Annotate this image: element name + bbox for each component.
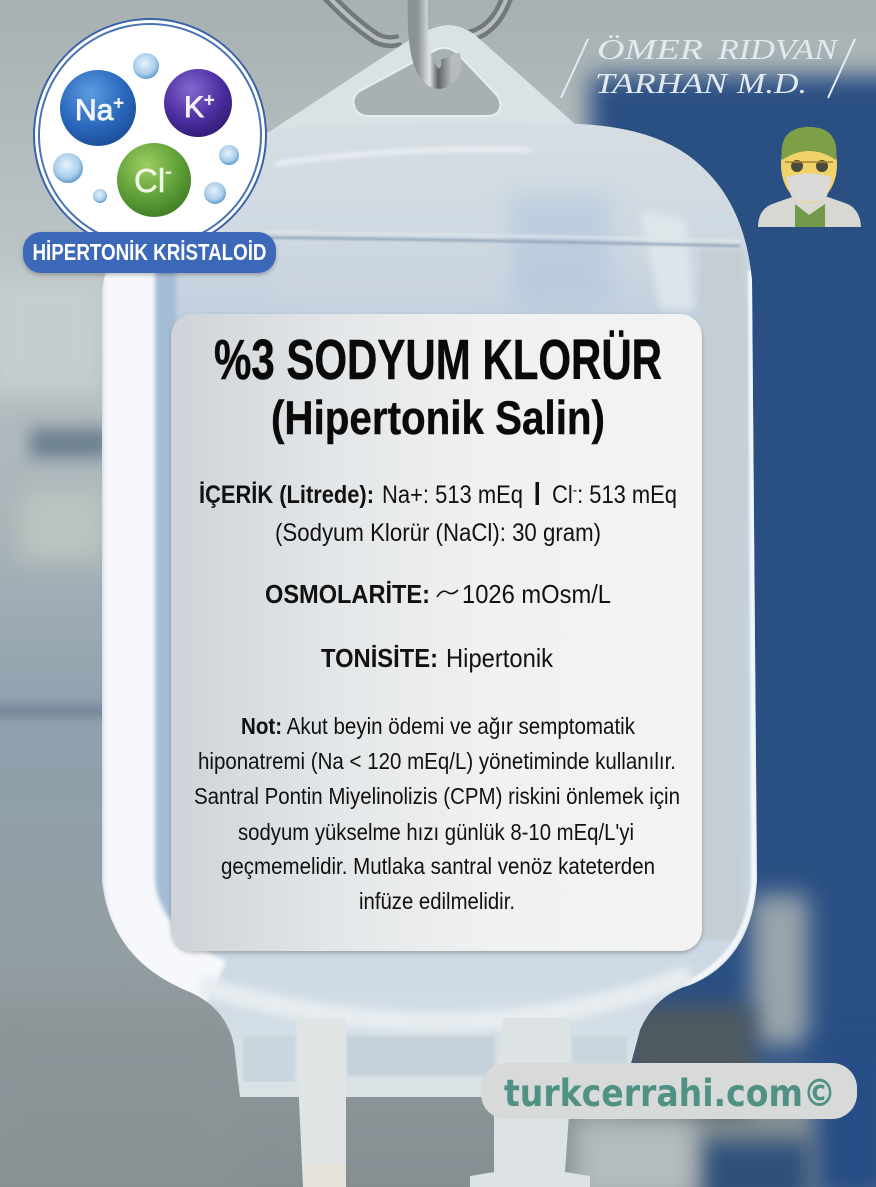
- bag hanger tab: [275, 25, 580, 140]
- top sheen: [275, 149, 530, 164]
- right shoulder highlight: [640, 210, 695, 310]
- author signature: [561, 34, 855, 100]
- chloride ion: Cl: [134, 162, 165, 199]
- osmolarity: [265, 579, 611, 609]
- website watermark: [481, 1063, 857, 1119]
- right slash: [828, 39, 855, 98]
- hanger hooks: [326, 0, 508, 42]
- left slash: [561, 39, 588, 98]
- author signature: ÖMER: [597, 34, 703, 66]
- bottom fold: [200, 975, 690, 1022]
- blue fluid patches: [510, 195, 610, 305]
- content line: : 513 mEq: [577, 481, 677, 509]
- left blue strip: [152, 262, 176, 942]
- author signature: RIDVAN: [717, 34, 839, 66]
- small bubbles: [53, 53, 239, 204]
- tonicity: TONİSİTE:: [321, 643, 438, 673]
- subtitle: (Hipertonik Salin): [271, 391, 605, 444]
- left tube: [296, 1018, 346, 1187]
- fluid seam: [100, 236, 740, 246]
- badge circle: [34, 19, 266, 251]
- potassium ion: K: [184, 91, 204, 124]
- title: %3 SODYUM KLORÜR: [214, 328, 662, 392]
- chloride ion: [117, 143, 191, 217]
- flap bottom rim: [243, 1082, 294, 1084]
- content line: -: [573, 482, 577, 499]
- left white wall: [129, 240, 215, 985]
- author signature: TARHAN: [595, 68, 729, 100]
- right grey wall: [700, 250, 744, 940]
- note paragraph: Santral Pontin Miyelinolizis (CPM) riskini önlemek için: [194, 783, 680, 809]
- badge ribbon: HİPERTONİK KRİSTALOİD: [32, 239, 266, 265]
- IV bag: [100, 0, 757, 1187]
- osmolarity: 1026 mOsm/L: [462, 579, 611, 609]
- bag body: [102, 122, 757, 1097]
- flap right section: [572, 1037, 626, 1063]
- content line: Na+: 513 mEq: [382, 481, 523, 509]
- content line: Cl: [552, 481, 576, 509]
- note paragraph: Not: Akut beyin ödemi ve ağır semptomatik: [241, 713, 635, 739]
- chloride ion: -: [165, 161, 172, 183]
- electrolyte badge: [23, 19, 276, 273]
- right tube: [470, 1018, 590, 1187]
- bag details: [100, 149, 754, 1097]
- sodium ion: +: [113, 93, 124, 113]
- potassium ion: +: [204, 90, 215, 110]
- tonicity: Hipertonik: [446, 643, 554, 673]
- content sub line: (Sodyum Klorür (NaCl): 30 gram): [275, 519, 601, 547]
- right wall highlight: [685, 270, 754, 985]
- note paragraph: hiponatremi (Na < 120 mEq/L) yönetiminde kullanılır.: [198, 748, 676, 774]
- note paragraph: [194, 713, 680, 914]
- content line: [199, 481, 677, 509]
- badge ribbon: [23, 232, 276, 273]
- middle metal ring: [418, 0, 452, 79]
- tonicity: [321, 643, 554, 673]
- osmolarity: OSMOLARİTE:: [265, 579, 430, 609]
- flap left section: [243, 1036, 295, 1084]
- note paragraph: geçmemelidir. Mutlaka santral venöz kateterden: [221, 853, 655, 879]
- potassium ion: [164, 69, 232, 137]
- note paragraph: sodyum yükselme hızı günlük 8-10 mEq/L'yi: [238, 819, 634, 845]
- left tube lower tint: [304, 1165, 346, 1187]
- icon: masked doctor: [758, 127, 861, 227]
- product label panel: [171, 314, 702, 951]
- author signature: M.D.: [736, 68, 807, 100]
- sodium ion: [60, 70, 136, 146]
- content line: İÇERİK (Litrede):: [199, 481, 374, 509]
- lower flap panel: [347, 1036, 495, 1076]
- tab slot: [353, 48, 500, 116]
- sodium ion: Na: [75, 94, 113, 127]
- website watermark: turkcerrahi.com©: [504, 1072, 836, 1115]
- note paragraph: infüze edilmelidir.: [359, 888, 515, 914]
